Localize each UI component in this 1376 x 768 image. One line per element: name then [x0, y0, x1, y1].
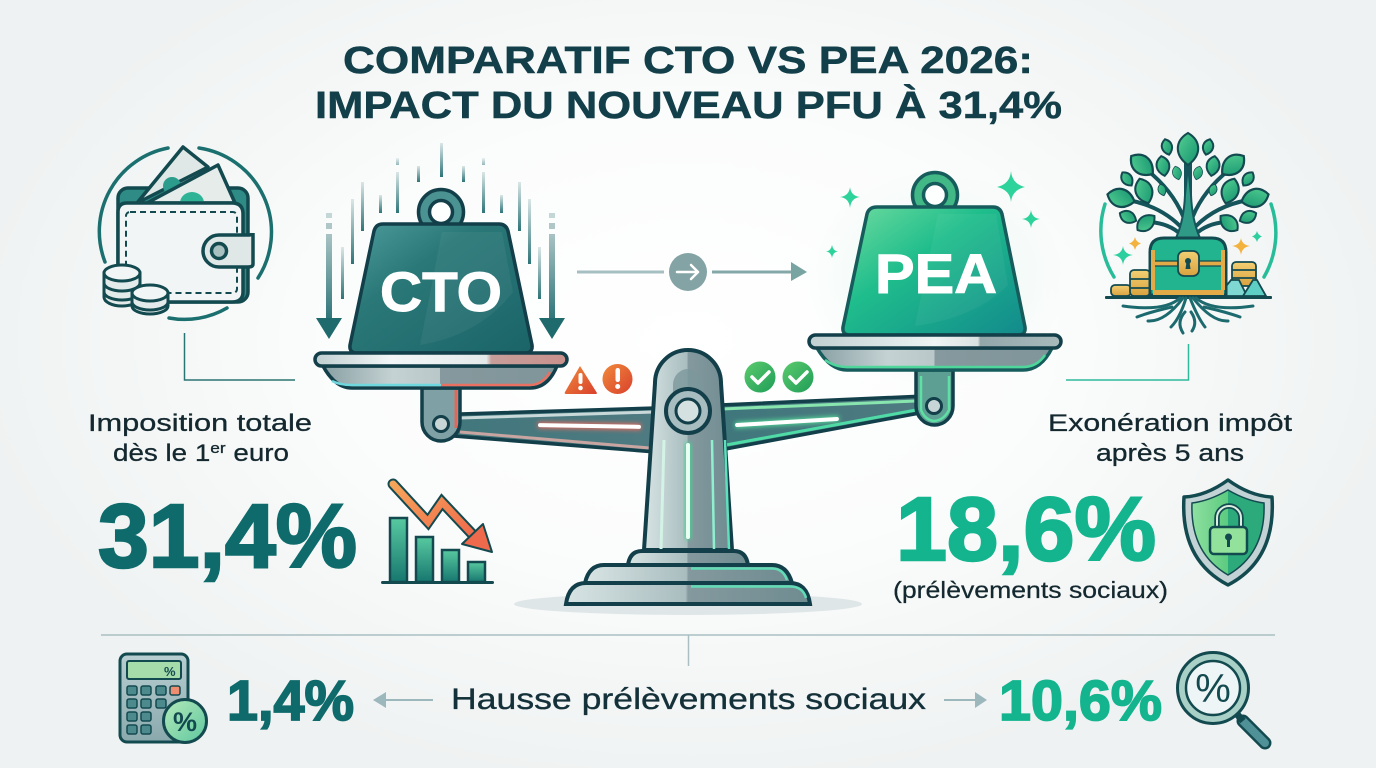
icon: shield with padlock [1184, 480, 1272, 585]
left description [88, 410, 312, 467]
icon: magnifier with percent: % [1195, 667, 1231, 711]
roots [1123, 298, 1253, 333]
stat: 18,6%: 18,6% [896, 480, 1156, 580]
label PEA: PEA [875, 242, 997, 305]
title [315, 40, 1062, 127]
icon: falling bar chart [381, 484, 494, 584]
connector: wallet to left text [184, 333, 295, 380]
left description: euro [226, 440, 289, 467]
base shadow [514, 593, 862, 615]
note: prélèvements sociaux: (prélèvements sociaux) [893, 577, 1168, 603]
left hanger [422, 388, 460, 441]
right description: Exonération impôt [1048, 410, 1292, 437]
right description [1048, 410, 1292, 467]
arrow: right downward pressure [539, 213, 565, 339]
glow behind PEA [805, 170, 1065, 390]
treasure chest [1150, 238, 1226, 295]
icon: calculator with percent badge: % [164, 664, 176, 679]
trunk and branches [1128, 160, 1248, 238]
icon: warning triangle and alert [565, 364, 632, 394]
motion lines: CTO falling pressure [341, 143, 541, 299]
icon: two green checks [744, 362, 814, 392]
right beam [720, 396, 925, 450]
pillar [644, 350, 732, 550]
leaves [1105, 133, 1271, 235]
title: IMPACT DU NOUVEAU PFU À 31,4% [315, 83, 1062, 127]
weight: PEA [843, 172, 1025, 335]
weight: CTO [350, 190, 532, 353]
connector: tree to right text [1066, 344, 1188, 380]
icon: wallet with banknotes and coins [99, 147, 271, 319]
right description: après 5 ans [1096, 440, 1244, 467]
stat: 31,4%: 31,4% [98, 487, 357, 587]
stat: 10,6%: 10,6% [999, 669, 1162, 733]
icon: money tree with treasure chest [1101, 133, 1276, 333]
coins and crystals [1111, 262, 1256, 296]
arrow: left downward pressure [316, 213, 342, 339]
icon: sparkles [826, 171, 1040, 258]
right pan [809, 335, 1061, 370]
stat: 1,4%: 1,4% [227, 669, 354, 733]
icon: calculator with percent badge: % [173, 707, 197, 737]
arrow: CTO to PEA transfer [577, 253, 807, 291]
left description: Imposition totale [88, 410, 312, 437]
left pan [315, 353, 567, 388]
arrow: left [373, 692, 433, 708]
divider [101, 635, 1275, 666]
scale: stand and beam [428, 350, 925, 615]
left description: er [210, 440, 226, 457]
label CTO: CTO [380, 260, 502, 323]
label: hausse prélèvements sociaux: Hausse prélèvements sociaux [451, 683, 926, 716]
small gold and green stars [1113, 231, 1262, 265]
icon: calculator with percent badge [120, 654, 206, 742]
arrow: right [944, 692, 987, 708]
icon: magnifier with percent [1178, 652, 1265, 743]
left beam [428, 408, 656, 452]
base tiers [566, 551, 810, 604]
title: COMPARATIF CTO VS PEA 2026: [343, 40, 1033, 82]
left description: dès le 1 [113, 440, 197, 467]
right hanger [916, 370, 953, 425]
